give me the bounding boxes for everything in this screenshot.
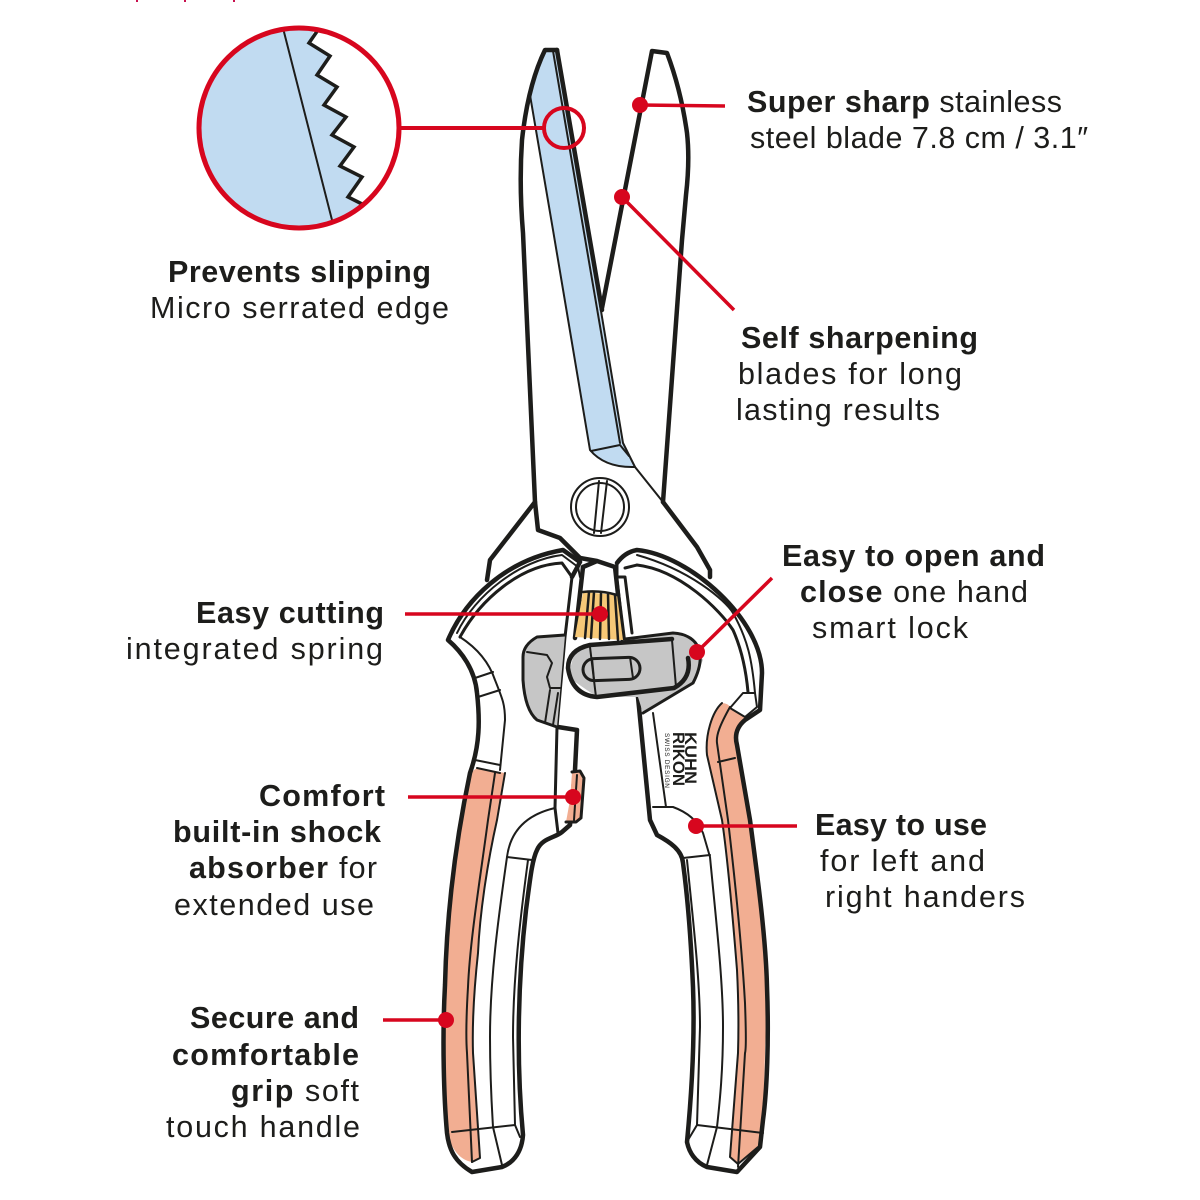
label: comfort [173, 779, 385, 922]
label: easy cutting: integrated spring [126, 632, 383, 666]
right handle [617, 550, 768, 1172]
label: super sharp blade [747, 85, 1088, 155]
label: comfort: built-in shock [173, 815, 381, 849]
brand logo: KUHN [681, 732, 700, 784]
label: secure grip: Secure and [190, 1001, 359, 1035]
label: prevents slipping: Micro serrated edge [150, 291, 449, 325]
label: secure grip: touch handle [166, 1110, 360, 1144]
brand logo: RIKON [669, 732, 688, 786]
label: easy to use: Easy to use [815, 808, 987, 842]
label: secure grip: grip soft [231, 1074, 360, 1108]
label: secure grip: comfortable [172, 1038, 359, 1072]
label: prevents slipping: Prevents slipping [168, 255, 431, 289]
label: easy to use: for left and [820, 844, 985, 878]
right grip band [707, 703, 767, 1164]
label: comfort: extended use [174, 888, 374, 922]
smart lock [568, 633, 703, 713]
spring [575, 591, 623, 640]
label: super sharp blade: Super sharp stainless [747, 85, 1062, 119]
label: easy cutting [126, 596, 384, 666]
label: easy cutting: Easy cutting [196, 596, 384, 630]
left handle [444, 550, 584, 1172]
pivot screw [571, 478, 629, 536]
brand logo: SWISS DESIGN [663, 733, 670, 788]
label: easy to use: right handers [825, 880, 1025, 914]
left grip band [444, 768, 505, 1162]
label: self sharpening: Self sharpening [741, 321, 978, 355]
label: self sharpening: blades for long [738, 357, 962, 391]
callout pointers [383, 97, 797, 1028]
label: comfort: Comfort [259, 779, 385, 813]
label: self sharpening [736, 321, 978, 427]
label: prevents slipping [150, 255, 449, 325]
blade shoulders [487, 502, 710, 580]
label: easy to open and close: Easy to open and [782, 539, 1045, 573]
left blade [521, 50, 663, 558]
label: easy to open and close: close one hand [800, 575, 1028, 609]
label: easy to open and close: smart lock [812, 611, 969, 645]
label: comfort: absorber for [189, 851, 377, 885]
left lock lever [523, 635, 565, 727]
illustration: garden snips [444, 50, 768, 1172]
brand logo [663, 732, 700, 788]
spring housing [575, 558, 623, 640]
label: easy to open and close [782, 539, 1045, 645]
label: super sharp blade: steel blade 7.8 cm / 3.1″ [750, 121, 1088, 155]
zoom connector [400, 108, 584, 148]
serrated edge magnifier [190, 20, 399, 240]
right blade [602, 51, 688, 502]
label: secure grip [166, 1001, 360, 1144]
label: self sharpening: lasting results [736, 393, 940, 427]
label: easy to use [815, 808, 1025, 914]
